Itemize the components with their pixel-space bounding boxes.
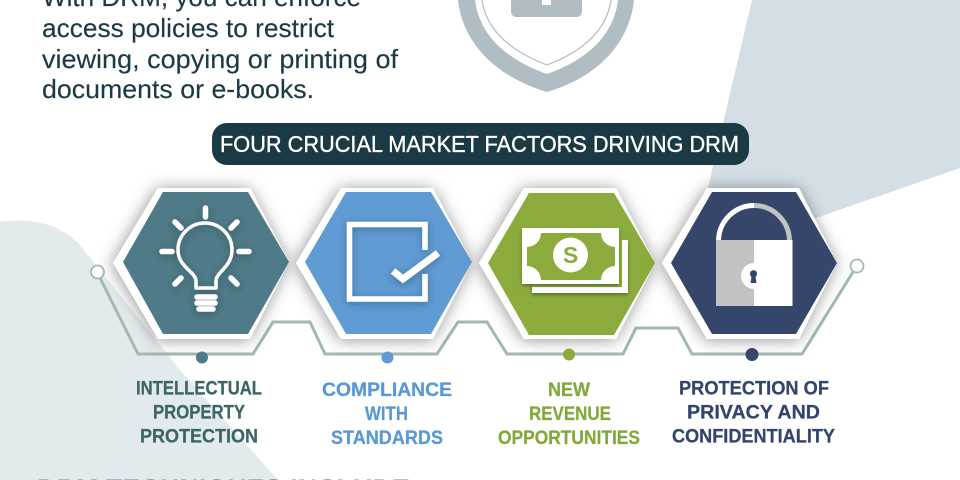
label: PRIVACY AND	[687, 402, 820, 424]
hexagon: green	[479, 188, 655, 339]
hexagon: navy	[662, 188, 837, 339]
label: NEW	[548, 380, 590, 401]
dot	[382, 352, 394, 364]
label: CONFIDENTIALITY	[672, 426, 835, 448]
label: PROTECTION OF	[679, 378, 829, 400]
label: REVENUE	[529, 404, 611, 425]
background shape: bottom left	[0, 221, 278, 480]
label: INTELLECTUAL	[136, 378, 262, 400]
factor 2: compliance	[296, 188, 472, 449]
label	[498, 380, 640, 449]
label: STANDARDS	[331, 428, 443, 449]
icon: shield with lock	[458, 0, 634, 92]
connector line	[91, 260, 864, 354]
icon: light bulb	[162, 208, 249, 309]
factor 1: intellectual property	[113, 188, 289, 448]
intro text: access policies to restrict	[42, 13, 335, 43]
label: PROTECTION	[140, 426, 258, 448]
dot	[746, 348, 758, 361]
label	[322, 380, 452, 449]
label: OPPORTUNITIES	[498, 428, 640, 449]
hexagon: blue	[296, 188, 472, 339]
dot	[196, 352, 208, 364]
icon: banknotes: S	[563, 242, 578, 268]
factor 4: privacy	[662, 188, 837, 448]
label: WITH	[365, 404, 408, 425]
label: COMPLIANCE	[322, 380, 452, 401]
hexagon: teal	[113, 188, 289, 339]
factor 3: new revenue	[479, 188, 655, 449]
intro text: documents or e-books.	[42, 74, 314, 104]
label: PROPERTY	[153, 402, 245, 424]
label	[672, 378, 835, 448]
icon: checkbox	[350, 224, 438, 299]
dot	[563, 348, 575, 360]
icon: banknotes	[522, 228, 628, 293]
intro text	[42, 0, 399, 104]
heading pill	[212, 123, 749, 165]
intro text: viewing, copying or printing of	[42, 44, 399, 74]
icon: padlock	[716, 205, 792, 306]
label	[136, 378, 262, 448]
background shape: top right	[690, 0, 960, 262]
heading pill: FOUR CRUCIAL MARKET FACTORS DRIVING DRM	[220, 131, 739, 157]
